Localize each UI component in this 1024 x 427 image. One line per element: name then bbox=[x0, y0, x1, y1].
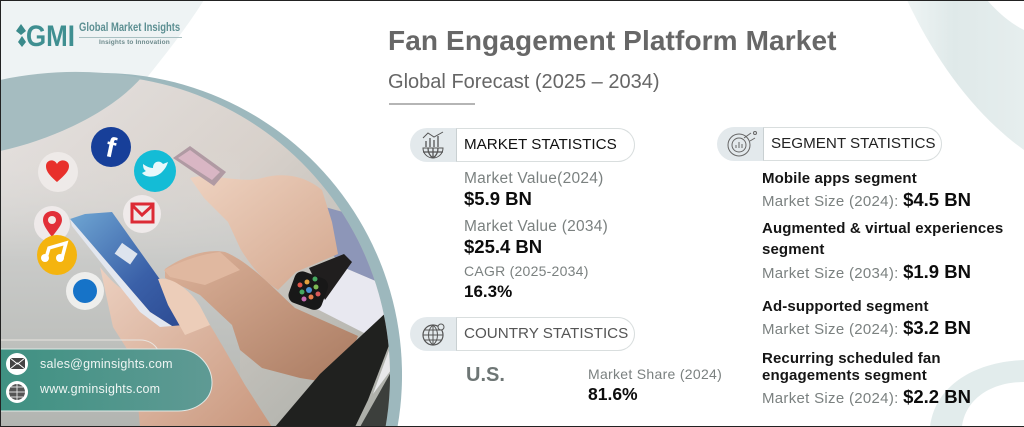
subtitle: Global Forecast (2025 – 2034) bbox=[388, 71, 660, 93]
upper hand bbox=[190, 175, 338, 290]
icon: segment target bbox=[728, 131, 757, 156]
contact: website: www.gminsights.com bbox=[40, 382, 160, 396]
icon: market chart globe bbox=[422, 132, 444, 158]
panel: segment statistics header: SEGMENT STATISTICS bbox=[771, 135, 936, 152]
bottom-right pale ring bbox=[930, 360, 1024, 427]
segment: recurring scheduled: Recurring scheduled fan bbox=[762, 350, 941, 367]
panel: market statistics header bbox=[410, 128, 635, 162]
stat: market share bbox=[588, 366, 722, 404]
index finger over phone bbox=[164, 252, 240, 285]
logo name: Global Market Insights bbox=[79, 22, 180, 34]
top-left pale shape bbox=[0, 0, 204, 100]
icon: globe pin bbox=[422, 324, 444, 346]
watch bbox=[286, 254, 352, 312]
segment: recurring scheduled: engagements segment bbox=[762, 367, 927, 384]
segment: augmented and virtual: segment bbox=[762, 241, 825, 258]
icon: facebook bbox=[91, 127, 131, 167]
segment: ad-supported: Ad-supported segment bbox=[762, 298, 929, 315]
icon: blue globe bbox=[66, 272, 104, 310]
stat: market value 2034: Market Value (2034) bbox=[464, 218, 608, 235]
panel: country statistics header: COUNTRY STATISTICS bbox=[464, 325, 628, 342]
segment: augmented and virtual: Market Size (2034): $1.9 BN bbox=[762, 261, 971, 282]
segment: mobile apps: Mobile apps segment bbox=[762, 170, 917, 187]
stat: market value 2034: $25.4 BN bbox=[464, 236, 542, 257]
teal arc bbox=[0, 73, 402, 427]
top-right pale ring bbox=[907, 0, 1024, 150]
icon: heart bbox=[38, 152, 78, 192]
stat: cagr: 16.3% bbox=[464, 282, 512, 301]
icon: facebook: f bbox=[103, 131, 119, 164]
stat: market value 2024 bbox=[464, 170, 603, 209]
logo bbox=[16, 22, 182, 48]
title rule bbox=[389, 103, 475, 105]
title: Fan Engagement Platform Market bbox=[388, 25, 837, 56]
contact bar outline bbox=[0, 340, 158, 350]
icon: mail bbox=[123, 195, 161, 233]
stat: market value 2024: $5.9 BN bbox=[464, 188, 532, 209]
photo bbox=[0, 60, 400, 427]
contact bar bbox=[0, 349, 212, 411]
thumb over phone bbox=[158, 279, 210, 335]
panel: segment statistics header bbox=[717, 127, 942, 161]
black sleeve bbox=[275, 308, 391, 427]
segment: augmented and virtual bbox=[762, 220, 1003, 282]
stat: market share: 81.6% bbox=[588, 384, 638, 404]
icon: twitter bbox=[134, 150, 176, 192]
left hand bbox=[100, 267, 272, 427]
icon: web globe bbox=[6, 381, 28, 403]
segment: ad-supported bbox=[762, 298, 971, 338]
panel: country statistics header bbox=[410, 317, 635, 351]
top-left teal leaf bbox=[0, 72, 141, 151]
stat: cagr bbox=[464, 263, 589, 301]
logo tagline: Insights to Innovation bbox=[99, 39, 170, 46]
icon: location pin bbox=[34, 206, 70, 242]
panel: market statistics header: MARKET STATISTICS bbox=[464, 136, 617, 153]
segment: mobile apps bbox=[762, 170, 971, 210]
stat: cagr: CAGR (2025-2034) bbox=[464, 263, 589, 279]
icon: music bbox=[37, 235, 77, 275]
stat: market value 2034 bbox=[464, 218, 608, 257]
segment: augmented and virtual: Augmented & virtual experiences bbox=[762, 220, 1003, 237]
stat: market value 2024: Market Value(2024) bbox=[464, 170, 603, 187]
rear arm sleeve bbox=[328, 208, 374, 280]
shirt cuff bbox=[318, 269, 388, 344]
segment: recurring scheduled bbox=[762, 350, 971, 407]
stat: country: U.S. bbox=[466, 364, 505, 386]
main phone bbox=[70, 212, 186, 326]
middle hand bbox=[165, 251, 358, 384]
contact: email: sales@gminsights.com bbox=[40, 357, 173, 371]
segment: mobile apps: Market Size (2024): $4.5 BN bbox=[762, 189, 971, 210]
segment: recurring scheduled: Market Size (2024): $2.2 BN bbox=[762, 386, 971, 407]
segment: ad-supported: Market Size (2024): $3.2 BN bbox=[762, 317, 971, 338]
stat: market share: Market Share (2024) bbox=[588, 366, 722, 382]
small phone bbox=[173, 146, 226, 186]
icon: envelope bbox=[6, 353, 28, 375]
